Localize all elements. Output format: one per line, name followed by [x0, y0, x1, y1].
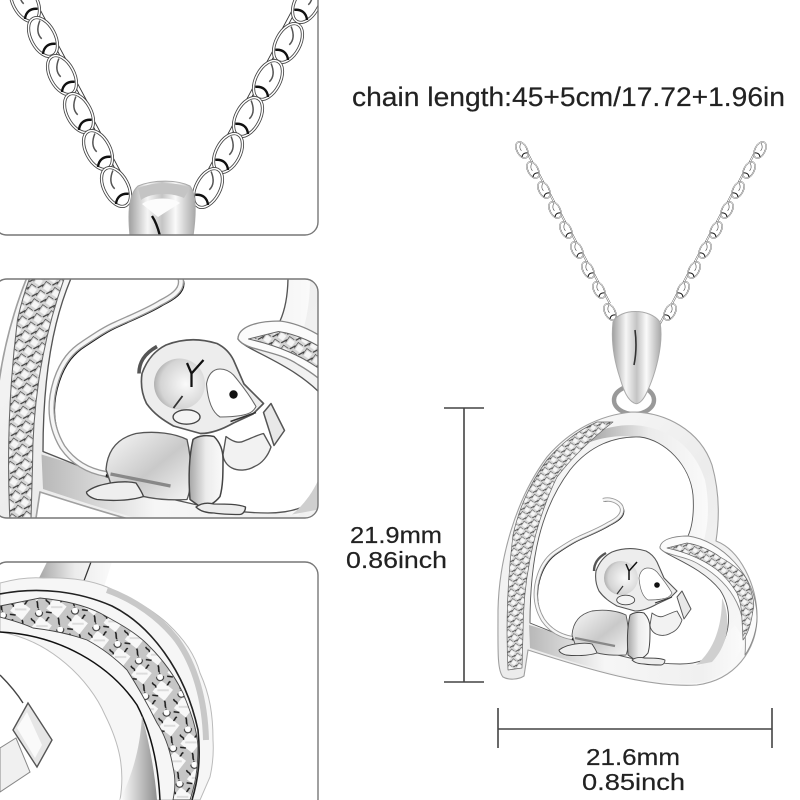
jump ring: [614, 386, 654, 414]
heart pendant with monkey: [498, 412, 757, 685]
chain left: [10, 0, 132, 208]
necklace chain left: [513, 140, 622, 329]
inner shaded band: [120, 716, 157, 800]
width dimension line: [498, 708, 772, 748]
width label: 21.6mm: [586, 744, 680, 770]
panel: chain close-up: [0, 0, 327, 236]
chain length label: chain length:45+5cm/17.72+1.96in: [352, 82, 785, 112]
panel: stone band close-up: [0, 562, 318, 800]
bail close-up: [129, 181, 195, 236]
heart band: [0, 578, 213, 800]
panel: monkey close-up: [0, 278, 319, 519]
height label: 21.9mm: [350, 522, 442, 548]
enlarged heart and monkey: [0, 280, 318, 518]
height label: 0.86inch: [346, 547, 447, 573]
book and hand: [0, 675, 52, 792]
necklace chain right: [658, 140, 769, 329]
full pendant necklace: [498, 140, 769, 685]
width label: [582, 744, 685, 795]
height label: [346, 522, 447, 573]
chain right: [192, 0, 318, 209]
width label: 0.85inch: [582, 769, 685, 795]
height dimension line: [444, 408, 484, 682]
bail: [612, 312, 661, 404]
inner curve: [0, 632, 160, 800]
bail stub: [39, 562, 104, 584]
stone row: [0, 598, 198, 800]
